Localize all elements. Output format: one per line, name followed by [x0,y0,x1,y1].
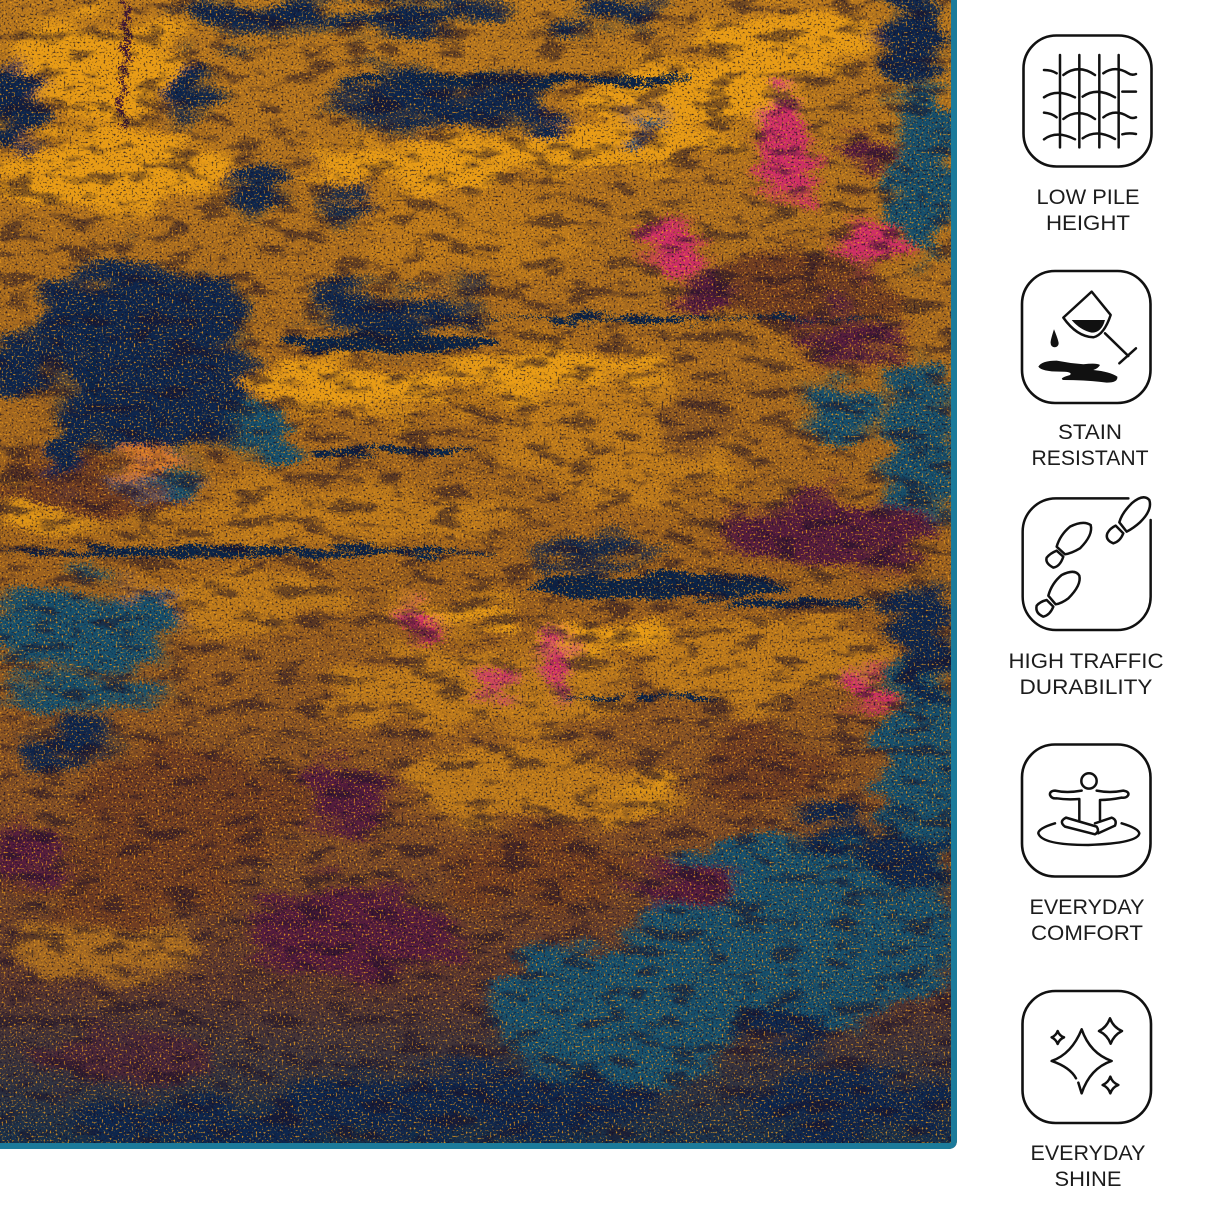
rug speckle [0,0,957,1150]
label: high traffic durability [1008,649,1164,699]
label: everyday comfort: EVERYDAY [1030,895,1144,919]
label: stain resistant: STAIN [1058,420,1122,444]
brown areas [0,245,890,930]
feature: low pile height [1024,36,1152,235]
label: everyday comfort: COMFORT [1031,921,1143,945]
icon: footprints [1023,497,1151,630]
label: everyday shine: EVERYDAY [1030,1141,1146,1165]
label: everyday shine: SHINE [1054,1167,1122,1191]
maroon areas [0,132,940,1086]
label: everyday comfort [1030,895,1144,945]
feature: stain resistant [1022,271,1150,470]
label: low pile height: LOW PILE [1036,185,1140,209]
rug border [0,0,954,1146]
feature: everyday shine [1022,991,1151,1191]
label: high traffic durability: DURABILITY [1020,675,1152,699]
label: everyday shine [1030,1141,1146,1191]
feature: everyday comfort [1022,744,1150,945]
rug streaks [0,0,885,702]
warm brown-gold areas [20,190,880,980]
rug photo [0,0,960,1150]
rug colour patches [0,0,960,1149]
feature: high traffic durability [1008,497,1164,699]
icon: low pile [1024,36,1152,166]
label: low pile height [1036,185,1140,235]
teal areas [0,80,960,1080]
gold areas [0,4,880,814]
label: high traffic durability: HIGH TRAFFIC [1008,649,1164,673]
label: low pile height: HEIGHT [1046,211,1130,235]
label: stain resistant [1032,420,1148,470]
pink areas [132,87,900,708]
icon: seated figure [1022,744,1150,876]
rug mottling [0,0,957,1150]
label: stain resistant: RESISTANT [1032,446,1148,470]
icon: wine glass spill [1022,271,1150,403]
icon: sparkles [1022,991,1151,1123]
dark navy areas [0,0,955,1149]
